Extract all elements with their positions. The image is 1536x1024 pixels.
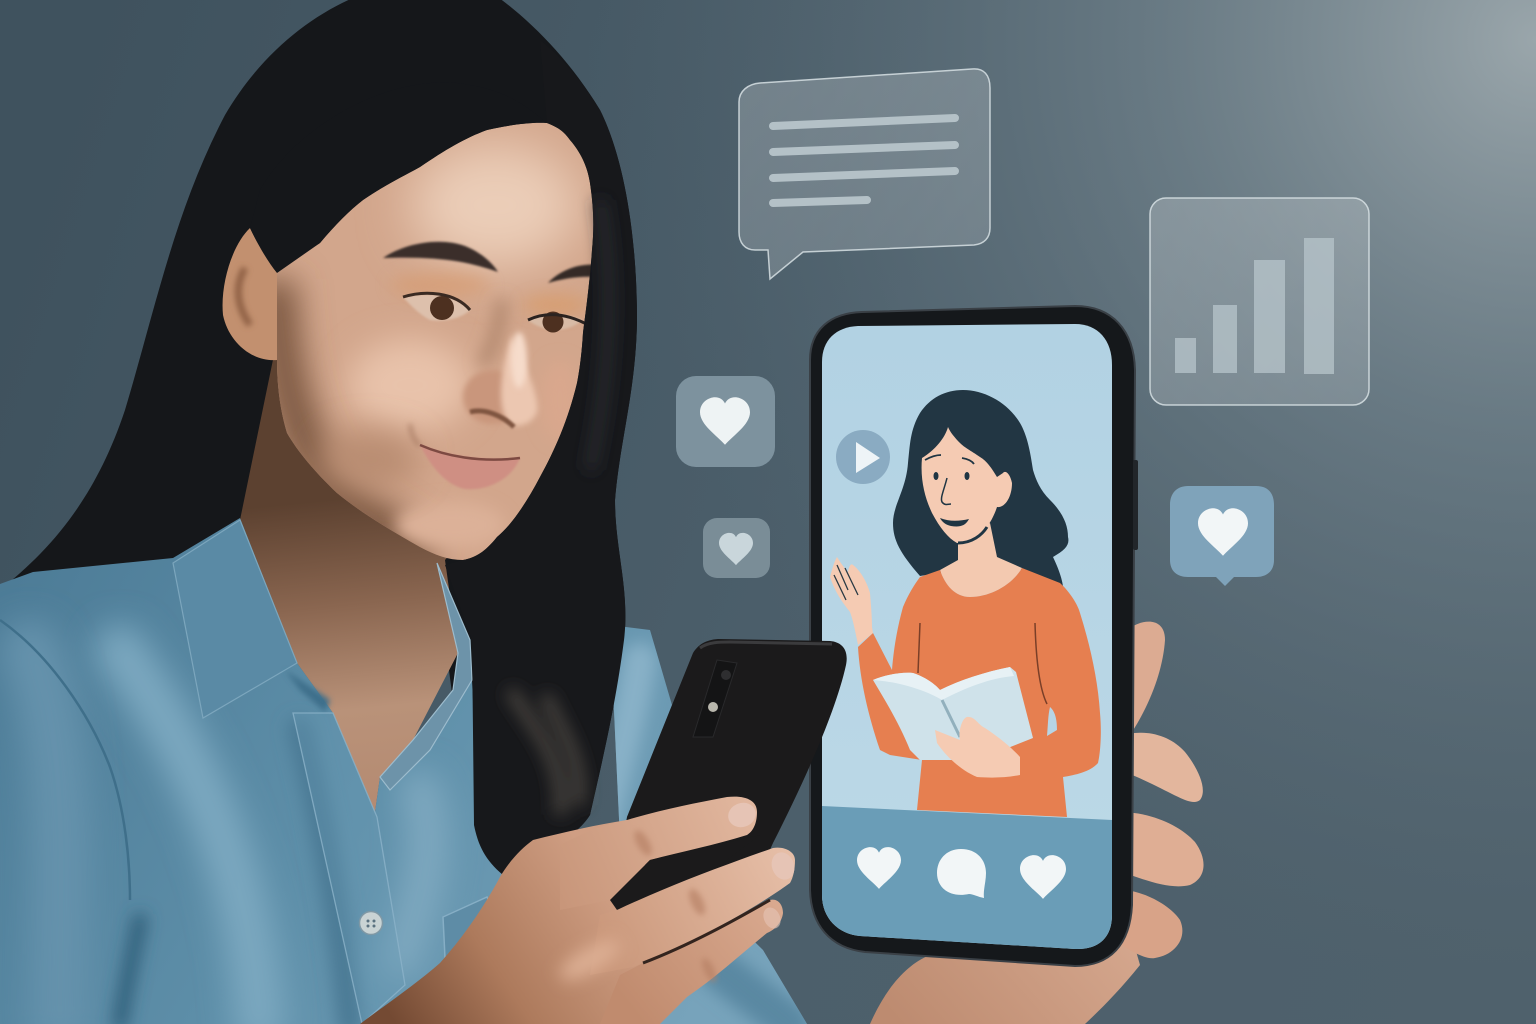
eyes [934, 472, 938, 480]
knuckles [631, 828, 719, 984]
nose [463, 300, 537, 427]
side button [1133, 460, 1138, 550]
presenter features [925, 455, 987, 543]
shirt collar left [173, 520, 297, 718]
shadow between middle and ring fingers [643, 900, 770, 963]
icon: bottom bar heart left [857, 847, 901, 889]
ear shading [238, 268, 250, 325]
floating like tile large [676, 376, 775, 467]
thumb [1130, 622, 1165, 735]
presenter sweater [858, 568, 1101, 817]
phone camera lens [721, 670, 731, 680]
on-screen bottom bar [822, 806, 1112, 949]
face [277, 122, 594, 560]
middle finger [590, 848, 795, 975]
floating message bubble [739, 69, 990, 279]
sweater fold lines [918, 623, 1047, 704]
ring finger [600, 900, 783, 1024]
right eye [528, 312, 590, 332]
dark gap between fingers [610, 835, 760, 910]
open book [873, 667, 1033, 760]
finger 2 [1120, 812, 1204, 886]
message text lines [773, 118, 955, 203]
screen [822, 324, 1112, 949]
smile crease [410, 424, 420, 446]
icon: bottom bar heart right [1020, 855, 1066, 899]
nose [941, 478, 951, 504]
on-screen illustration: presenter woman [830, 390, 1101, 817]
chin and jaw [395, 501, 505, 549]
floating like notification [1170, 486, 1274, 586]
eye socket right [523, 295, 587, 315]
woman's hair, back layer [0, 0, 637, 875]
held phone and fingers [360, 639, 847, 1024]
left eyebrow [383, 242, 498, 272]
palm [360, 820, 680, 1024]
eye socket left [390, 273, 490, 297]
big phone's holding hand [870, 622, 1204, 1024]
phone body [810, 306, 1135, 966]
right cheek [557, 372, 579, 442]
phone edge highlight [700, 642, 832, 648]
hair, right side of face and lower lock [445, 40, 637, 875]
left eye [403, 293, 470, 321]
sweater armpit gap [1047, 707, 1057, 736]
cheek light [348, 339, 472, 431]
hair, hairline front left [250, 82, 547, 273]
presenter hair [893, 390, 1068, 605]
fabric light and dark folds [30, 650, 790, 1024]
shirt placket [293, 713, 405, 1024]
temple dark [275, 280, 430, 555]
ear [223, 228, 285, 360]
phone flash [708, 702, 718, 712]
big phone [810, 306, 1138, 966]
presenter neck [940, 523, 1022, 597]
shirt pocket [443, 897, 500, 958]
forehead light [410, 143, 580, 267]
shirt collar right [380, 563, 472, 790]
hair strand highlights [510, 690, 579, 815]
finger 1 [1118, 733, 1203, 802]
mouth [940, 518, 969, 526]
shirt sleeve seam [0, 620, 130, 900]
icon: bottom bar comment bubble [937, 849, 986, 898]
lips [420, 445, 520, 489]
hair strand side [590, 200, 609, 470]
presenter face [922, 427, 1012, 543]
finger 3 [1122, 890, 1182, 958]
palm [870, 930, 1140, 1024]
back of small phone [610, 639, 847, 935]
presenter hand on book [935, 717, 1020, 778]
left cheek edge under cheekbone [320, 430, 420, 490]
floating bar chart card [1150, 198, 1369, 405]
brows [925, 455, 974, 464]
shirt collar shadow [285, 670, 330, 712]
right eyebrow [548, 265, 596, 283]
icon: play button [836, 430, 890, 484]
shirt [0, 500, 820, 1024]
chin line [958, 527, 987, 543]
neck [240, 350, 500, 812]
fingernails [725, 799, 798, 931]
bars [1175, 238, 1334, 374]
floating like tile small [703, 518, 770, 578]
index finger [560, 797, 757, 910]
presenter raised hand [830, 557, 873, 645]
hand highlight [555, 933, 625, 987]
phone camera module [693, 660, 737, 737]
shirt button [360, 912, 382, 934]
